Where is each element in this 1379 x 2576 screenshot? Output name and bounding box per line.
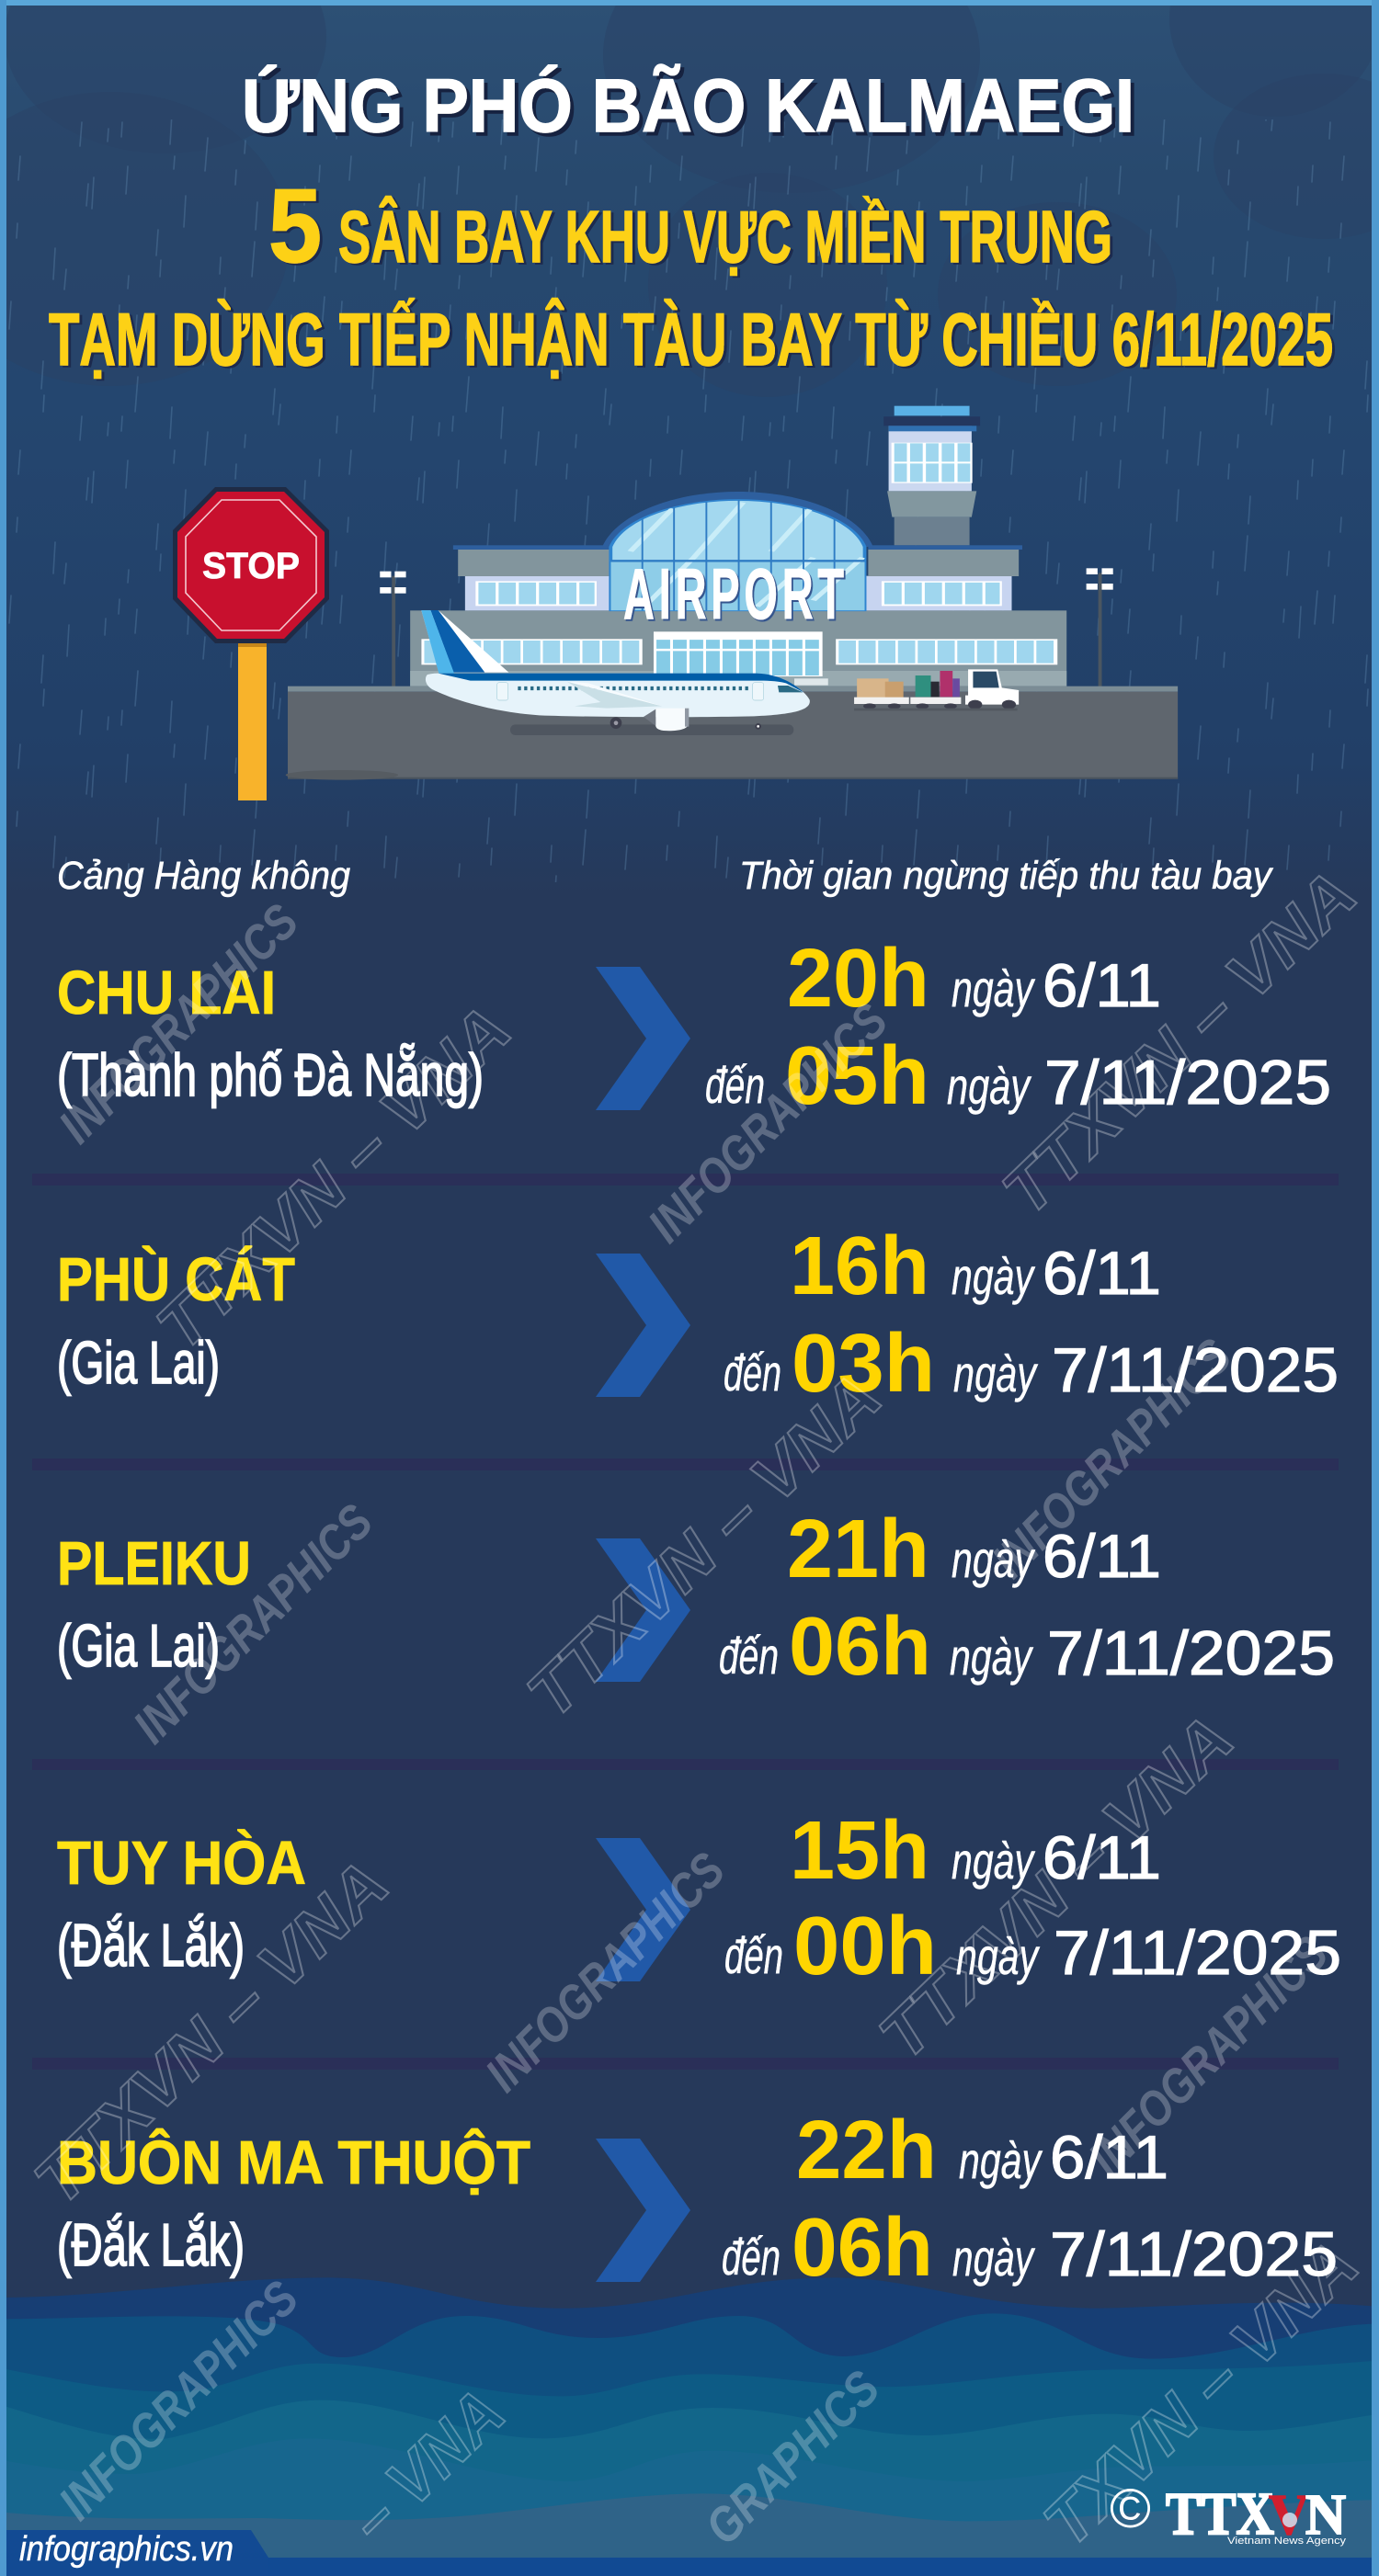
row: Pleiku: 21h [787,1504,929,1595]
row: Phu Cat: ngày [952,1247,1035,1305]
row: Pleiku: ngày [950,1628,1033,1685]
row: Chu Lai: (Thành phố Đà Nẵng) [57,1041,484,1108]
arrow [596,1838,690,1981]
row: Chu Lai [57,933,1331,1122]
logo: copyright mark: © [1110,2478,1151,2539]
watermark: TTXVN - VNA stamps [21,857,1373,2561]
row: Chu Lai: đến [705,1056,765,1114]
logo: TTXVN: N [1305,2484,1346,2547]
column heading: suspension time: Thời gian ngừng tiếp thu tàu bay [739,854,1273,898]
entrance [654,631,828,686]
watermark: INFOGRAPHICS stamps: INFOGRAPHICS [982,1329,1242,1588]
row: Tuy Hoa: ngày [952,1832,1035,1889]
arrow [596,967,690,1110]
logo: TTXVN [1166,2480,1347,2548]
arrow [596,2139,690,2282]
row: Buon Ma Thuot [57,2105,1338,2294]
row: Phu Cat: 16h [790,1220,929,1312]
row: Tuy Hoa [57,1805,1341,1992]
watermark: INFOGRAPHICS stamps: INFOGRAPHICS [1078,1926,1339,2185]
illustration: airport terminal [286,406,1178,780]
watermark: TTXVN - VNA stamps: – VNA [336,2376,519,2557]
text: AIRPORT sign: AIRPORT [623,554,849,634]
row: Pleiku: 6/11 [1043,1522,1161,1590]
footer: website tab: infographics.vn [19,2530,234,2569]
background: sea waves [0,2277,1379,2576]
row: Chu Lai: 20h [787,933,929,1025]
arrow [596,1254,690,1397]
row: Chu Lai: 7/11/2025 [1044,1048,1331,1118]
watermark: TTXVN - VNA stamps: TTXVN – VNA [21,1847,403,2219]
row: Chu Lai: CHU LAI [57,959,276,1027]
illustration: airplane [421,610,810,735]
background: rain streaks [7,119,1372,882]
row: Chu Lai: 05h [785,1030,929,1122]
row: Pleiku: 7/11/2025 [1047,1618,1335,1688]
row: Tuy Hoa: 00h [793,1901,937,1992]
row: Pleiku: (Gia Lai) [57,1612,220,1679]
row: Tuy Hoa: TUY HÒA [57,1829,306,1898]
row: Buon Ma Thuot: ngày [952,2229,1035,2287]
row: Tuy Hoa: 6/11 [1043,1823,1161,1891]
watermark: TTXVN - VNA stamps: TTXVN – VNA [514,1360,895,1732]
logo: TTXVN: V [1269,2484,1309,2547]
apron [286,687,1178,780]
watermark: TTXVN - VNA stamps: TTXVN – VNA [866,1702,1248,2074]
row: Buon Ma Thuot: (Đắk Lắk) [57,2211,245,2278]
row: Pleiku: 06h [789,1601,931,1693]
row: Phu Cat: 6/11 [1043,1239,1161,1307]
row: Buon Ma Thuot: 22h [796,2105,937,2196]
subtitle line 1: 5 [268,168,322,285]
watermark: TTXVN - VNA stamps: TXVN – VNA [1031,2227,1373,2561]
watermark: INFOGRAPHICS stamps: INFOGRAPHICS [49,2271,309,2530]
watermark: TTXVN - VNA stamps: TTXVN – VNA [143,993,525,1365]
watermark: INFOGRAPHICS stamps [49,894,1339,2555]
row: Phu Cat: 03h [792,1318,935,1410]
row: Phu Cat: PHÙ CÁT [57,1245,295,1314]
footer: bottom strip [0,2558,1379,2576]
row: Phu Cat [57,1220,1339,1410]
row: Phu Cat: (Gia Lai) [57,1329,220,1396]
row: Chu Lai: ngày [952,959,1035,1017]
row: Buon Ma Thuot: BUÔN MA THUỘT [57,2128,530,2197]
row: Buon Ma Thuot: 06h [792,2202,933,2294]
glass dome [602,492,873,610]
row: Chu Lai: ngày [947,1057,1031,1115]
background: storm clouds [0,0,1379,397]
icon: stop sign: STOP [202,546,300,586]
row: Tuy Hoa: 7/11/2025 [1054,1918,1341,1988]
watermark: INFOGRAPHICS stamps: INFOGRAPHICS [123,1494,383,1753]
row: Tuy Hoa: 15h [790,1805,929,1897]
background: rainy sky [0,0,1379,896]
panel: airport table background [0,893,1379,2576]
floodlight right [1087,568,1113,688]
row: Pleiku [57,1504,1335,1693]
row: Pleiku: ngày [952,1530,1035,1588]
lower windows [421,639,1057,664]
subtitle line 1 [268,168,1112,285]
title: ỨNG PHÓ BÃO KALMAEGI [242,64,1134,148]
watermark: INFOGRAPHICS stamps: INFOGRAPHICS [638,993,898,1253]
arrow [596,1538,690,1682]
row: Phu Cat: đến [724,1344,781,1401]
logo: TTXVN: TTX [1166,2480,1274,2548]
lower building [410,610,1066,687]
upper wings [453,545,1022,610]
watermark: TTXVN - VNA stamps: TTXVN – VNA [989,857,1371,1230]
row: Tuy Hoa: đến [724,1926,783,1984]
row: Phu Cat: 7/11/2025 [1052,1335,1339,1405]
floodlight left [380,572,406,692]
row: Tuy Hoa: ngày [956,1927,1040,1985]
watermark: INFOGRAPHICS stamps: INFOGRAPHICS [475,1843,735,2102]
logo: TTXVN: Vietnam News Agency [1227,2536,1347,2547]
watermark: INFOGRAPHICS stamps: GRAPHICS [695,2360,890,2555]
baggage train [854,669,1019,710]
row: Pleiku: đến [719,1627,779,1685]
row: Buon Ma Thuot: đến [722,2228,781,2286]
row: Buon Ma Thuot: 7/11/2025 [1050,2219,1338,2289]
row: Phu Cat: ngày [953,1345,1038,1402]
row: Buon Ma Thuot: ngày [959,2131,1043,2189]
row: Chu Lai: 6/11 [1043,951,1161,1019]
watermark: INFOGRAPHICS stamps: INFOGRAPHICS [49,894,309,1153]
icon: stop sign [173,487,329,800]
row: Buon Ma Thuot: 6/11 [1050,2123,1168,2191]
column heading: airports: Cảng Hàng không [57,854,350,898]
row: Tuy Hoa: (Đắk Lắk) [57,1912,245,1979]
control tower [883,406,980,545]
row: Pleiku: PLEIKU [57,1529,251,1598]
